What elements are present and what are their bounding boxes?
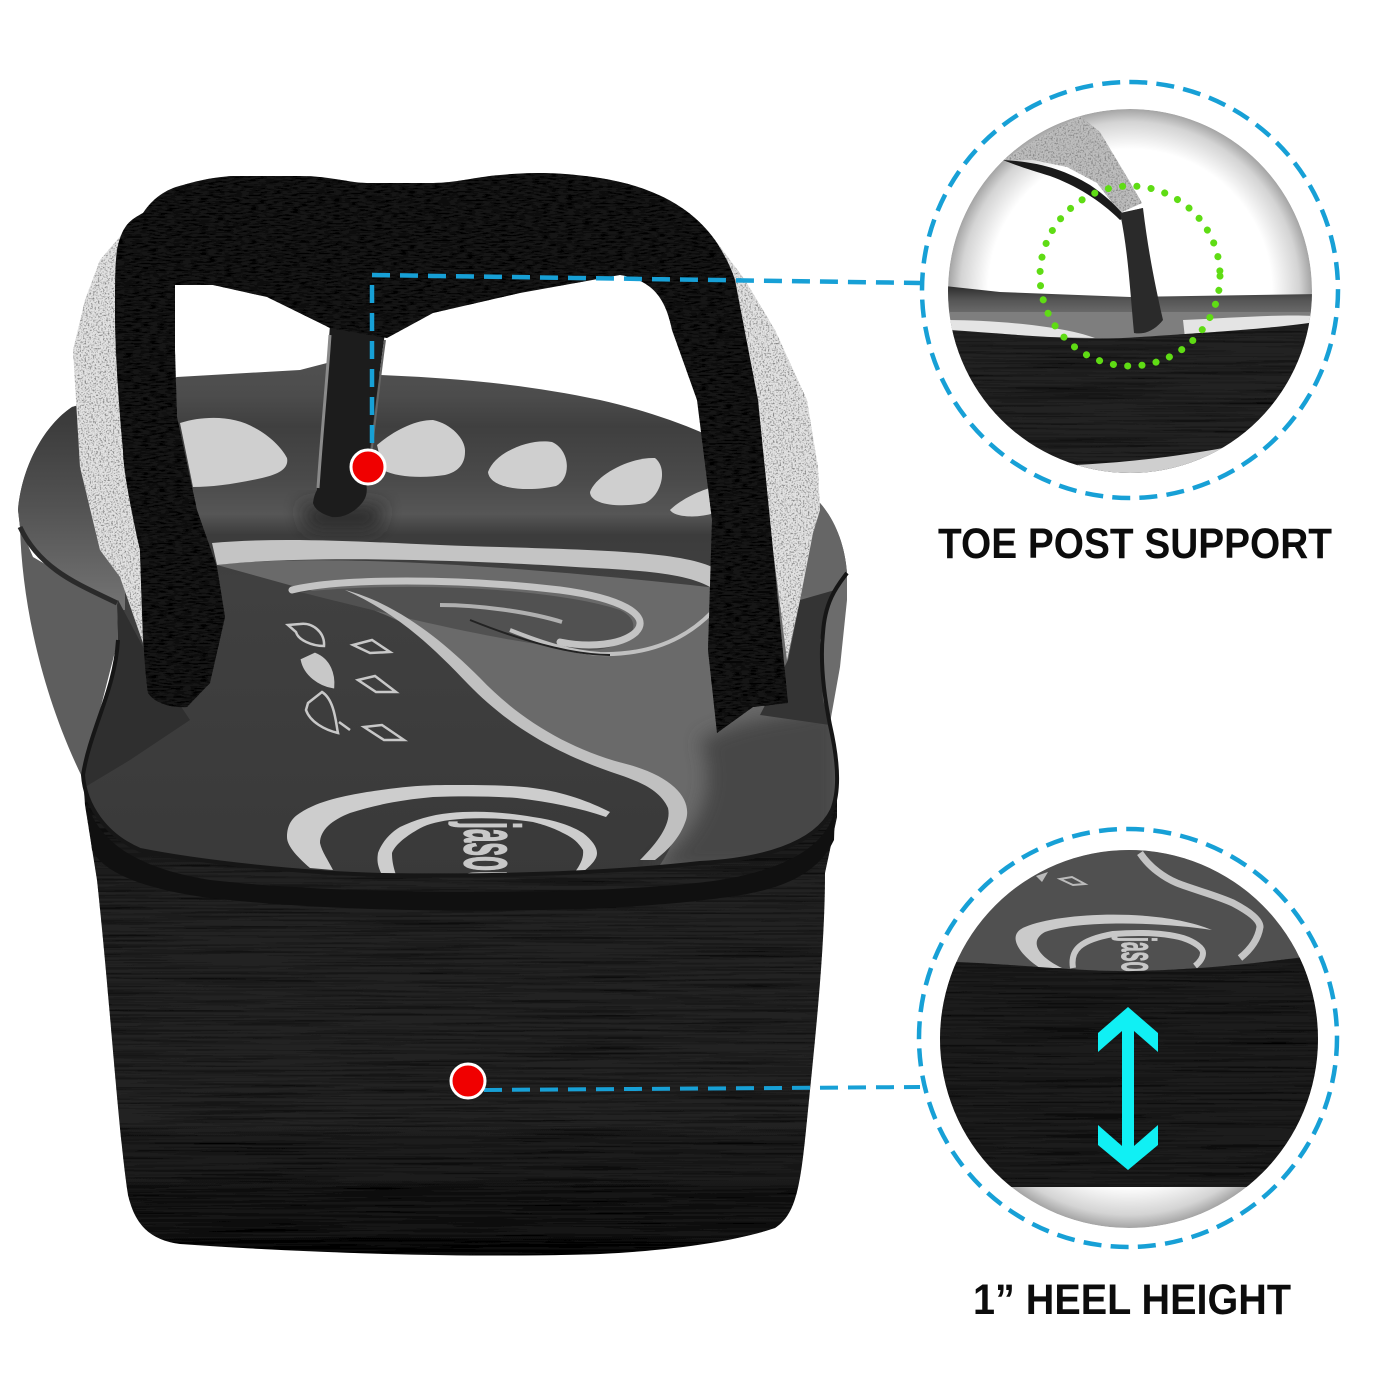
dark ledge at left heel: [80, 600, 190, 790]
arch stripe: [212, 540, 712, 587]
lit area right of the wave: [217, 560, 845, 865]
toe post: [313, 325, 386, 517]
inner swirl pocket: [300, 587, 633, 650]
dark ledge beside right strap: [760, 590, 835, 725]
leader line: heel: [484, 1087, 920, 1090]
footbed: [0, 355, 860, 886]
panel: toe post support: [922, 82, 1338, 568]
right sole side wall: [823, 573, 847, 723]
dashed ring: [919, 829, 1337, 1247]
heel block: [83, 770, 837, 1256]
label: heel height: 1” HEEL HEIGHT: [973, 1276, 1291, 1324]
right forefoot ledge: [771, 502, 847, 597]
dashed ring: [922, 82, 1338, 498]
zoomed photo: heel: jasou: [1111, 937, 1164, 983]
heel ring outer: [287, 785, 610, 870]
panel: heel height: [919, 829, 1337, 1324]
red dot: [451, 1064, 485, 1098]
arch swirl: [292, 581, 640, 645]
shaded heel cup right: [660, 702, 835, 865]
red dot: [351, 450, 385, 484]
black thong strap: [115, 173, 788, 733]
toe post shadow: [300, 505, 385, 530]
heel rim: [86, 800, 835, 911]
cyan double arrow: [1098, 1007, 1158, 1170]
footbed edge lines: [20, 527, 117, 603]
paw icons: [288, 624, 404, 740]
left glitter strap: [73, 233, 143, 643]
sandal product photo: jasou: [448, 821, 536, 886]
zoomed photo: heel: [935, 848, 1325, 1228]
zoomed photo: toe post: [945, 109, 1320, 480]
right glitter strap: [715, 240, 820, 660]
toe blobs: [180, 418, 714, 516]
wave line: [345, 590, 687, 860]
left sole side wall: [20, 527, 118, 777]
green dotted ring: [1040, 186, 1220, 366]
left forefoot ledge: [18, 406, 125, 610]
callout pin: toe post: [351, 275, 920, 484]
leader line: toe post: [372, 275, 920, 443]
sandal product photo: [0, 173, 920, 1256]
callout pin: heel: [451, 1064, 920, 1098]
heel ring inner: [377, 812, 597, 875]
label: toe post support: TOE POST SUPPORT: [938, 520, 1332, 568]
